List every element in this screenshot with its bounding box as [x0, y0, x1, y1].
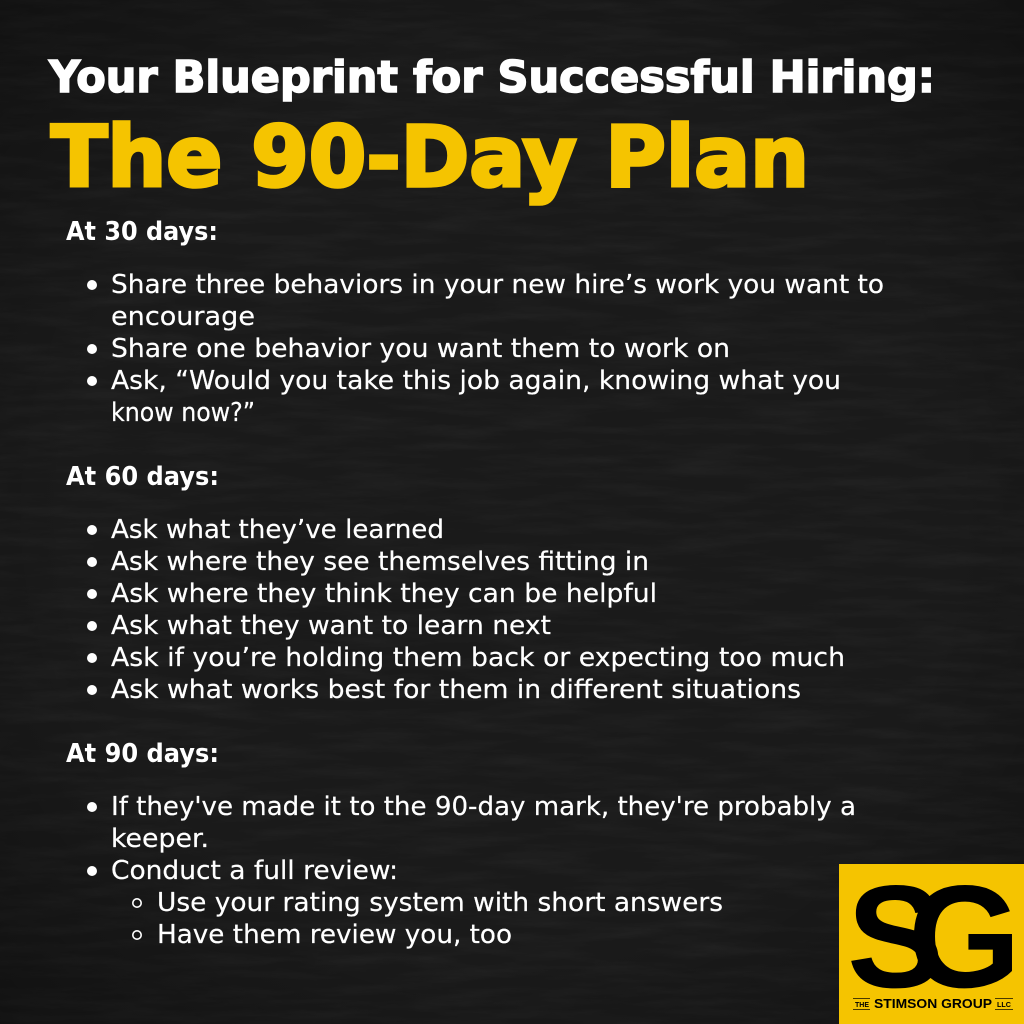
bullet list: 90 days: If they've made it to the 90-day mark, they're probably a [111, 792, 856, 822]
bullet list: 30 days [87, 270, 884, 428]
bullet list: 30 days: Ask, “Would you take this job again, knowing what you [111, 366, 841, 396]
bullet list: 60 days: Ask what works best for them in different situations [111, 675, 801, 705]
bullet list: 60 days: Ask what they want to learn next [111, 611, 551, 641]
logo: The Stimson Group: STIMSON GROUP [874, 997, 992, 1011]
bullet list: 30 days: Share one behavior you want them to work on [111, 334, 730, 364]
bullet list: 90 days: Use your rating system with short answers [157, 888, 723, 918]
bullet list: 90 days [87, 792, 856, 950]
section: at 60 days [66, 462, 845, 705]
bullet list: 60 days: Ask where they see themselves fitting in [111, 547, 649, 577]
title line: the 90-day plan: The 90-Day Plan [51, 108, 809, 206]
bullet list: 60 days [87, 515, 845, 705]
bullet list: 90 days: keeper. [111, 824, 209, 854]
logo: The Stimson Group: THE [855, 1000, 869, 1009]
bullet list: 60 days: Ask if you’re holding them back or expecting too much [111, 643, 845, 673]
bullet list: 30 days: Share three behaviors in your new hire’s work you want to [111, 270, 884, 300]
heading: at 30 days: At 30 days: [66, 217, 218, 247]
heading: at 60 days: At 60 days: [66, 462, 219, 492]
title line: blueprint: Your Blueprint for Successful Hiring: [48, 52, 935, 103]
logo: The Stimson Group: LLC [997, 1000, 1012, 1009]
logo: The Stimson Group: S [847, 855, 944, 1018]
section: at 30 days [66, 217, 884, 428]
section: at 90 days [66, 739, 856, 950]
title [48, 52, 935, 206]
bullet list: 30 days: know now?” [111, 398, 255, 428]
heading: at 90 days: At 90 days: [66, 739, 219, 769]
bullet list: 60 days: Ask where they think they can be helpful [111, 579, 657, 609]
bullet list: 60 days: Ask what they’ve learned [111, 515, 444, 545]
bullet list: 30 days: encourage [111, 302, 255, 332]
bullet list: 90 days: Conduct a full review: [111, 856, 398, 886]
bullet list: 90 days: Have them review you, too [157, 920, 512, 950]
logo: The Stimson Group [839, 855, 1024, 1024]
logo: The Stimson Group: G [908, 855, 1021, 1018]
